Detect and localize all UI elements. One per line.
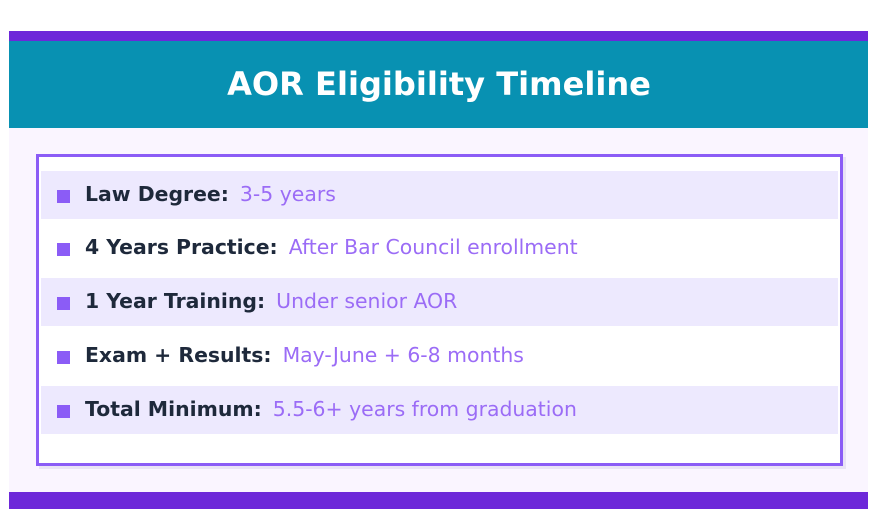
row: training	[41, 278, 838, 326]
row: total	[41, 386, 838, 434]
row: exam	[57, 342, 524, 366]
row: training: Under senior AOR	[276, 288, 457, 312]
timeline box	[36, 154, 843, 466]
row: practice: 4 Years Practice:	[85, 234, 278, 258]
row: law degree: 3-5 years	[240, 182, 336, 206]
bottom purple bar	[9, 492, 868, 509]
row: training: 1 Year Training:	[85, 288, 265, 312]
header	[9, 41, 868, 128]
row: law degree	[41, 171, 838, 219]
row: exam: Exam + Results:	[85, 342, 272, 366]
row: total: Total Minimum:	[85, 396, 262, 420]
row: law degree: Law Degree:	[85, 182, 229, 206]
body panel	[9, 128, 868, 492]
row: exam: May-June + 6-8 months	[283, 342, 524, 366]
row: total: 5.5-6+ years from graduation	[273, 396, 577, 420]
header: AOR Eligibility Timeline	[227, 64, 651, 102]
row: practice	[57, 234, 578, 258]
top purple bar	[9, 31, 868, 41]
row: practice: After Bar Council enrollment	[289, 234, 578, 258]
